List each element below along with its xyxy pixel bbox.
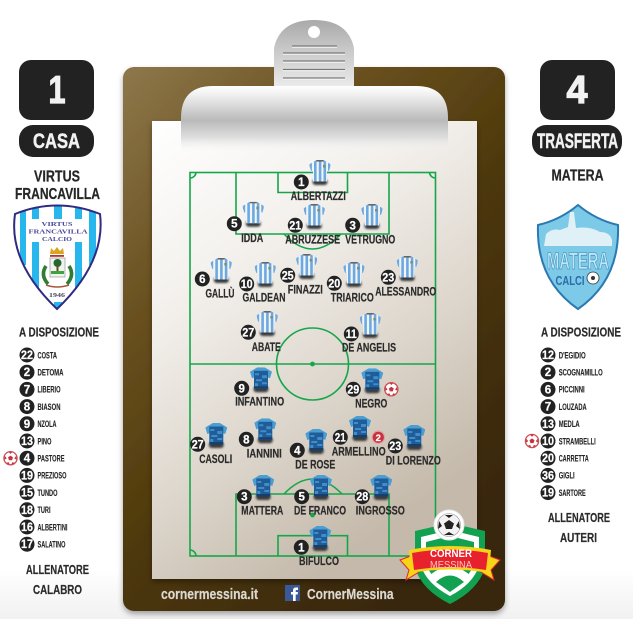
home player: Abate: 27 <box>242 327 254 339</box>
away bench list: SARTORE <box>559 488 586 498</box>
away player: De Franco <box>294 475 346 518</box>
home bench list: 4 <box>24 453 31 465</box>
away player: Infantino <box>234 367 284 408</box>
home player: Galdean: GALDEAN <box>242 290 286 304</box>
logo: Corner Messina badge: MESSINA <box>430 559 472 571</box>
home bench list: COSTA <box>38 350 57 360</box>
home score box: 1 <box>48 69 66 112</box>
away score box: 4 <box>566 69 588 112</box>
home bench list: 8 <box>24 402 31 414</box>
away bench list: 12 <box>542 350 554 362</box>
away bench list: 36 <box>542 470 554 482</box>
home player: Alessandro: ALESSANDRO <box>375 284 436 298</box>
away bench list: 10 <box>542 436 554 448</box>
away bench list: PICCINNI <box>559 385 585 395</box>
footer website: cornermessina.it <box>161 587 258 603</box>
away player: Bifulco <box>294 526 339 568</box>
away player: Bifulco: 1 <box>298 542 305 554</box>
home player: Idda: IDDA <box>241 231 264 245</box>
home player: Abruzzese: 21 <box>289 220 302 232</box>
panel: clipboard board <box>123 67 505 611</box>
logo: Corner Messina badge: CORNER <box>430 548 472 560</box>
away coach: ALLENATORE <box>548 511 610 525</box>
away player: Armellino with red badge <box>332 416 386 458</box>
home player: Galdean: 10 <box>241 279 253 291</box>
home player: Triarico <box>327 262 374 304</box>
away player: Ingrosso <box>355 475 405 518</box>
home player: Vetrugno: VETRUGNO <box>345 232 395 246</box>
home coach <box>26 563 89 597</box>
home score box <box>19 60 94 120</box>
away coach <box>548 511 610 545</box>
home bench list <box>4 348 67 552</box>
home bench list: BIASON <box>38 402 61 412</box>
home bench list: TUNDO <box>38 488 58 498</box>
away player: Bifulco: BIFULCO <box>299 554 339 568</box>
home player: Gallù: GALLÙ <box>206 286 234 300</box>
home bench list: 22 <box>21 350 33 362</box>
home coach: CALABRO <box>33 583 82 597</box>
home player: Gallù: 6 <box>199 274 206 286</box>
away bench list: 6 <box>545 384 551 396</box>
away player: Iannini <box>239 418 282 460</box>
away player: Armellino with red badge: ARMELLINO <box>332 444 386 458</box>
home coach: ALLENATORE <box>26 563 89 577</box>
away player: De Franco: DE FRANCO <box>294 504 346 518</box>
away player: De Rose: 4 <box>294 445 301 457</box>
away player: Iannini: 8 <box>243 434 250 446</box>
away bench list: GIGLI <box>559 471 575 481</box>
home bench heading: A DISPOSIZIONE <box>19 326 99 340</box>
home team name <box>15 168 100 203</box>
home player: Albertazzi <box>291 160 346 203</box>
home bench list: PREZIOSO <box>38 471 66 481</box>
home player: Finazzi <box>280 254 323 296</box>
home player: Galdean <box>239 262 286 304</box>
home bench list: 13 <box>21 436 33 448</box>
away label: trasferta <box>532 125 622 157</box>
home player: De Angelis: 11 <box>346 329 357 341</box>
away player: Di Lorenzo: 23 <box>389 441 401 453</box>
home player: Alessandro <box>375 256 436 298</box>
away player: Infantino: 9 <box>238 383 245 395</box>
home player: Gallù <box>195 258 234 300</box>
home player: Triarico: TRIARICO <box>331 290 374 304</box>
away player: Mattera <box>237 475 284 518</box>
away player: Di Lorenzo <box>386 425 441 468</box>
away bench list: LOUZADA <box>559 402 587 412</box>
home team name: VIRTUS <box>34 168 80 186</box>
home player: Abate <box>241 311 281 354</box>
home bench list: 9 <box>24 419 30 431</box>
home player: Abruzzese <box>285 204 340 246</box>
home bench list: PASTORE <box>38 454 64 464</box>
home bench list: DETOMA <box>38 368 64 378</box>
icon: Virtus Francavilla crest <box>14 205 101 315</box>
home label: casa: CASA <box>33 130 80 153</box>
home player: Albertazzi: 1 <box>298 177 305 189</box>
home bench list: 2 <box>24 367 30 379</box>
away player: De Rose <box>290 429 335 472</box>
home player: Albertazzi: ALBERTAZZI <box>291 189 346 203</box>
icon: Virtus Francavilla crest: CALCIO <box>42 236 72 243</box>
home player: Idda: 5 <box>231 219 238 231</box>
home player: Abate: ABATE <box>252 340 281 354</box>
away team name: MATERA <box>552 168 604 185</box>
away player: De Rose: DE ROSE <box>295 458 335 472</box>
away player: Ingrosso: 28 <box>356 492 369 504</box>
away player: Armellino with red badge: 21 <box>335 432 346 444</box>
icon: clipboard tab <box>274 20 354 88</box>
home bench list: 7 <box>24 384 30 396</box>
panel: paper sheet <box>152 121 477 579</box>
home bench list: 16 <box>21 522 33 534</box>
home player: De Angelis <box>342 313 396 354</box>
home bench list: TURI <box>38 505 50 515</box>
icon: clipboard clamp <box>181 86 448 152</box>
home player: Idda <box>227 202 264 245</box>
home player: Abruzzese: ABRUZZESE <box>285 232 340 246</box>
icon: Matera crest: CALCI <box>556 273 584 288</box>
home bench list: 19 <box>21 470 33 482</box>
home bench list: LIBERIO <box>38 385 60 395</box>
away player: Mattera: 3 <box>241 492 248 504</box>
icon: Matera crest <box>538 205 618 309</box>
icon: Virtus Francavilla crest: FRANCAVILLA <box>28 228 88 236</box>
away bench list: 13 <box>542 419 554 431</box>
home bench list: 18 <box>21 505 34 517</box>
home player: Finazzi: 25 <box>282 270 294 282</box>
away bench list: 20 <box>542 453 554 465</box>
away player: Di Lorenzo: DI LORENZO <box>386 454 441 468</box>
away player: Negro with goal <box>346 368 398 410</box>
away bench list <box>525 348 603 500</box>
away player: Casoli: CASOLI <box>199 452 232 466</box>
home bench list: 15 <box>21 488 34 500</box>
icon: Virtus Francavilla crest: 1946 <box>49 292 66 299</box>
home bench list: 17 <box>21 539 33 551</box>
home player: Triarico: 20 <box>328 278 340 290</box>
home label: casa <box>19 125 94 157</box>
home bench list: PINO <box>38 436 52 446</box>
away player: Ingrosso: INGROSSO <box>356 504 405 518</box>
away player: Negro with goal: NEGRO <box>355 396 387 410</box>
away player: Casoli: 27 <box>192 439 204 451</box>
home bench list: ALBERTINI <box>38 522 68 532</box>
home player: Vetrugno: 3 <box>349 220 356 232</box>
away bench list: 7 <box>545 402 551 414</box>
pitch lines <box>190 172 436 556</box>
away bench list: CARRETTA <box>559 454 589 464</box>
icon: Virtus Francavilla crest: VIRTUS <box>42 221 73 228</box>
home bench list: NZOLA <box>38 419 57 429</box>
home player: De Angelis: DE ANGELIS <box>342 340 396 354</box>
away player: Casoli <box>190 423 232 466</box>
away player: Armellino with red badge: 2 <box>376 433 381 444</box>
away player: De Franco: 5 <box>298 492 305 504</box>
away bench list: D'EGIDIO <box>559 350 586 360</box>
icon: facebook <box>285 585 300 601</box>
home player: Alessandro: 23 <box>382 272 394 284</box>
away player: Infantino: INFANTINO <box>235 394 284 408</box>
away bench list: 19 <box>542 488 554 500</box>
away coach: AUTERI <box>560 531 597 545</box>
away bench list: MEDLA <box>559 419 580 429</box>
away player: Mattera: MATTERA <box>241 504 284 518</box>
footer facebook name: CornerMessina <box>307 587 394 603</box>
home player: Finazzi: FINAZZI <box>288 282 323 296</box>
away bench list: SCOGNAMILLO <box>559 368 603 378</box>
away bench list: 2 <box>545 367 551 379</box>
away bench list: STRAMBELLI <box>559 436 596 446</box>
logo: Corner Messina badge <box>400 510 500 604</box>
away player: Negro with goal: 29 <box>347 384 359 396</box>
away score box <box>540 60 615 120</box>
home bench list: SALATINO <box>38 540 66 550</box>
home team name: FRANCAVILLA <box>15 186 100 203</box>
home player: Vetrugno <box>345 204 395 246</box>
away player: Iannini: IANNINI <box>247 446 282 460</box>
